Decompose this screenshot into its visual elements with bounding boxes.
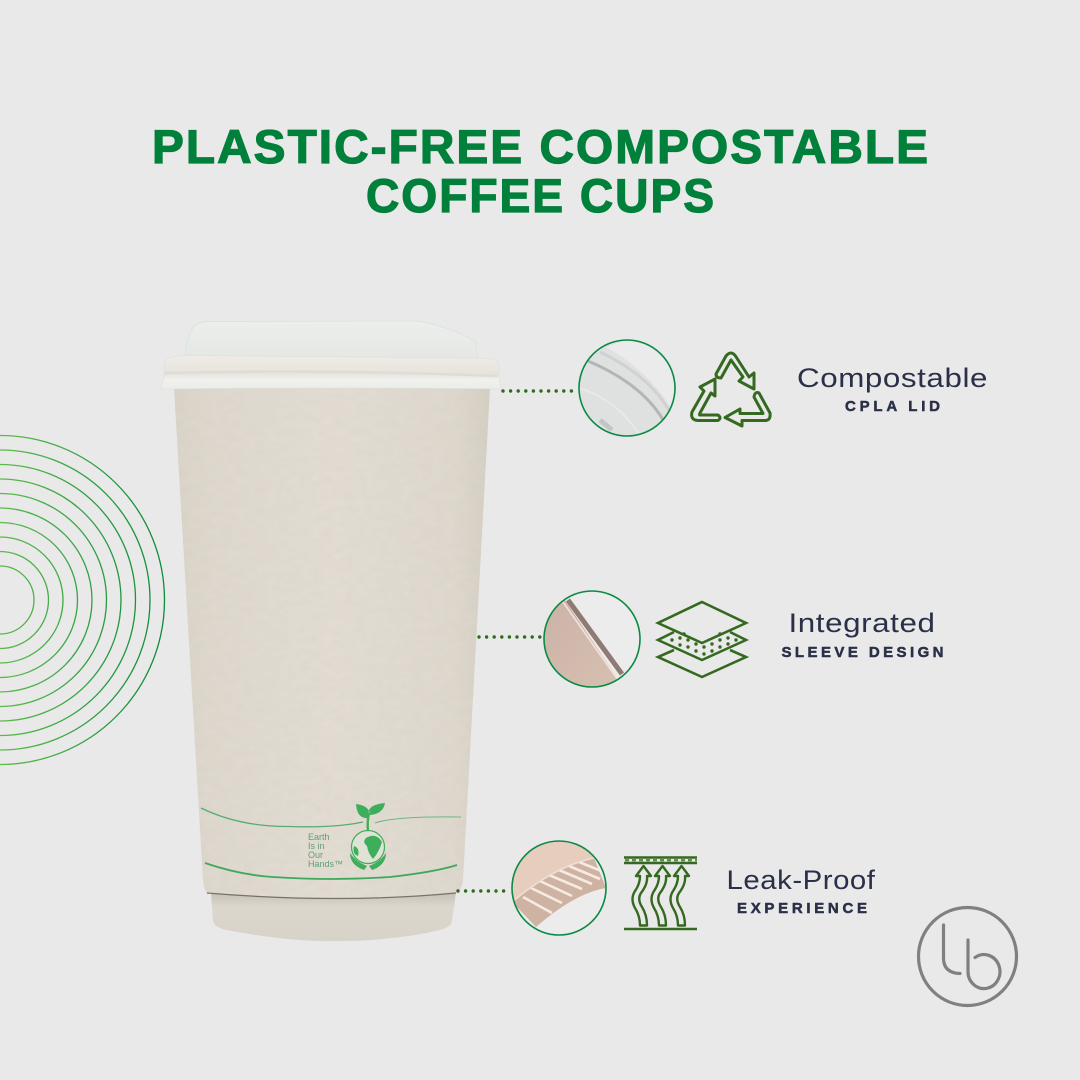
logo: lb <box>918 908 1016 1006</box>
cup print: lines and Earth logo <box>201 803 461 879</box>
cup print: lines and Earth logo: Earth <box>308 832 330 842</box>
label: leak-proof <box>726 865 876 917</box>
icon: layers <box>658 602 746 677</box>
sleeve edge shadow <box>207 893 456 898</box>
detail circle: sleeve close-up <box>543 590 641 688</box>
cup body with sleeve <box>174 388 490 898</box>
lid <box>160 321 502 389</box>
cup print: lines and Earth logo: Hands™ <box>308 859 343 869</box>
decorative concentric rings <box>0 436 164 764</box>
detail circle: lid close-up <box>578 339 676 437</box>
label: integrated: Integrated <box>788 608 936 638</box>
icon: sprout globe <box>350 803 386 870</box>
label: compostable: Compostable <box>797 363 988 393</box>
label: compostable <box>797 363 988 415</box>
title <box>152 120 930 222</box>
label: integrated: SLEEVE DESIGN <box>782 644 944 661</box>
title: PLASTIC-FREE COMPOSTABLE <box>152 120 930 173</box>
title: COFFEE CUPS <box>366 169 716 222</box>
label: leak-proof: EXPERIENCE <box>737 900 867 917</box>
connector: base <box>458 889 511 893</box>
coffee cup <box>160 321 502 941</box>
label: integrated <box>782 608 944 661</box>
label: leak-proof: Leak-Proof <box>726 865 876 895</box>
cup base <box>211 892 456 941</box>
connector: sleeve <box>479 635 543 639</box>
label: compostable: CPLA LID <box>845 398 940 415</box>
icon: recycling triangle <box>692 353 770 426</box>
icon: rising heat arrows <box>624 858 697 929</box>
cup print: lines and Earth logo: Is in <box>308 841 325 851</box>
detail circle: base close-up <box>511 840 607 936</box>
connector: lid <box>503 389 577 393</box>
cup print: lines and Earth logo: Our <box>308 850 323 860</box>
